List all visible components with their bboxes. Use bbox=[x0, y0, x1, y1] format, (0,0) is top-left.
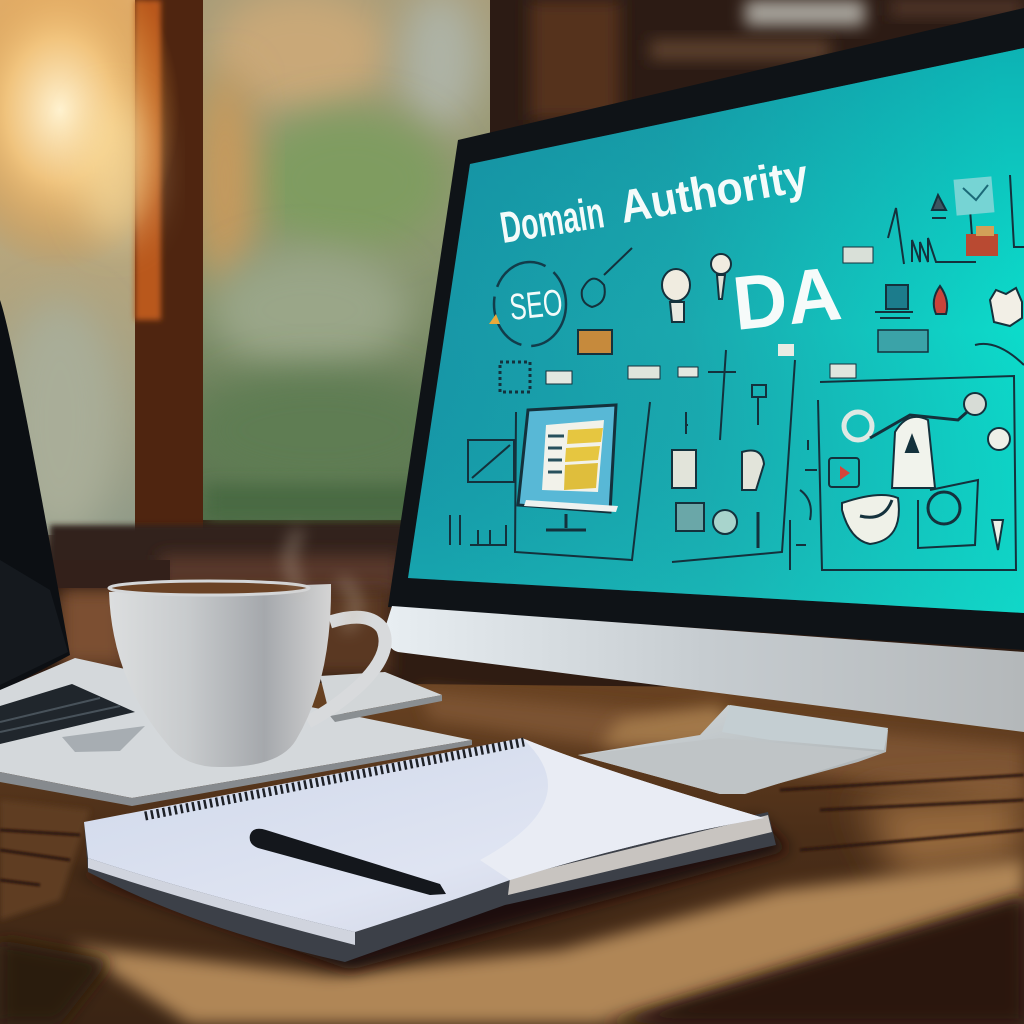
heading: Domain Authority: Domain bbox=[497, 188, 607, 253]
window frame bbox=[135, 0, 203, 560]
screen bbox=[408, 48, 1024, 613]
monitor bezel bbox=[388, 8, 1024, 650]
monitor bbox=[386, 8, 1024, 732]
monitor stand bbox=[578, 705, 888, 794]
doodle icons: top row bbox=[582, 175, 1024, 365]
notebook shadow bbox=[70, 820, 790, 970]
pen bbox=[250, 829, 446, 895]
laptop screen bbox=[0, 300, 70, 692]
heading: Domain Authority bbox=[497, 149, 812, 253]
coffee bbox=[109, 581, 309, 595]
heading: Domain Authority: Authority bbox=[616, 149, 812, 233]
SEO badge bbox=[489, 262, 566, 346]
DA label: DA bbox=[729, 251, 845, 347]
monitor chin bbox=[386, 606, 1024, 732]
notebook page bbox=[84, 738, 764, 932]
cup handle bbox=[308, 617, 385, 722]
laptop base bbox=[0, 658, 472, 798]
doodle panel: connected lines and devices bbox=[450, 350, 1016, 570]
SEO badge: SEO bbox=[508, 282, 565, 328]
cup body bbox=[109, 584, 331, 767]
background: window and room bbox=[0, 0, 1024, 700]
coffee cup bbox=[109, 530, 385, 767]
shelves right bbox=[530, 0, 620, 120]
spiral binding bbox=[145, 742, 524, 816]
sun glow bbox=[0, 0, 180, 270]
doodle panel: document on screen bbox=[518, 405, 618, 530]
pages edge bbox=[84, 812, 776, 962]
steam bbox=[290, 530, 356, 630]
laptop bbox=[0, 300, 472, 806]
notebook bbox=[70, 738, 790, 970]
table bbox=[0, 680, 1024, 1024]
